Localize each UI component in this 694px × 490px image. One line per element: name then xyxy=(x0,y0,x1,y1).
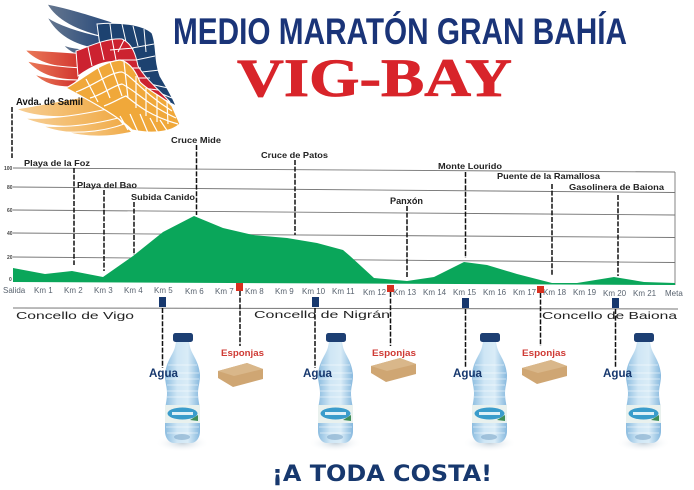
water station km 15 xyxy=(462,298,469,368)
route marker: Monte Lourido xyxy=(438,161,502,258)
label: Concello de Vigo: Concello de Vigo xyxy=(16,310,134,322)
label: Agua 3: Agua xyxy=(453,366,482,380)
km labels: Km 5 xyxy=(154,286,173,295)
pale lower feathers xyxy=(16,96,132,136)
icon: sponge 3 xyxy=(522,360,567,384)
chart axis labels: 40 xyxy=(7,231,13,237)
route marker: Subida Canido xyxy=(131,192,195,255)
route marker: Playa del Bao xyxy=(77,180,137,271)
water station km 20 xyxy=(612,298,619,368)
km labels: Km 16 xyxy=(483,288,507,297)
route marker: Cruce de Patos: Cruce de Patos xyxy=(261,150,328,160)
subtitle: VIG-BAY: VIG-BAY xyxy=(237,48,512,108)
label: Concello de Baiona: Concello de Baiona xyxy=(542,310,677,322)
route marker: Playa de la Foz xyxy=(24,158,90,265)
route marker: Cruce de Patos xyxy=(261,150,328,235)
sponge station km 7.5 xyxy=(236,283,243,346)
km labels: Km 3 xyxy=(94,286,113,295)
km labels xyxy=(3,286,683,298)
route marker: Avda. de Samil: Avda. de Samil xyxy=(16,96,83,108)
icon: water bottle 4 xyxy=(616,333,670,452)
label: Esponjas 1: Esponjas xyxy=(221,348,264,359)
chart: elevation profile xyxy=(3,166,683,298)
water station km 10 xyxy=(312,297,319,368)
chart grid xyxy=(13,168,675,285)
route marker: Puente de la Ramallosa: Puente de la Ramallosa xyxy=(497,171,600,181)
route marker: Panxón: Panxón xyxy=(390,196,423,206)
km labels: Km 19 xyxy=(573,288,597,297)
municipalities divider xyxy=(13,308,678,309)
slogan: ¡A TODA COSTA! xyxy=(272,462,492,487)
km labels: Km 1 xyxy=(34,286,53,295)
label: Esponjas 3: Esponjas xyxy=(522,348,566,359)
navy feathers xyxy=(47,4,176,106)
km labels: Km 6 xyxy=(185,287,204,296)
chart axis labels xyxy=(4,166,13,283)
water station km 5 xyxy=(159,297,166,368)
route marker: Puente de la Ramallosa xyxy=(497,171,600,276)
km labels: Km 11 xyxy=(332,287,355,296)
label: Agua 2: Agua xyxy=(303,366,332,380)
icon: water bottle 1 xyxy=(156,333,210,452)
chart axis labels: 60 xyxy=(7,208,13,214)
red feathers xyxy=(25,39,170,102)
km labels: Km 2 xyxy=(64,286,83,295)
km labels: Km 10 xyxy=(302,287,326,296)
icon: water bottle 2 xyxy=(308,333,362,452)
route marker: Monte Lourido: Monte Lourido xyxy=(438,161,502,171)
sponge station km 17.5 xyxy=(537,286,544,346)
sponge station km 12.5 xyxy=(387,285,394,346)
km labels: Salida xyxy=(3,286,26,295)
route marker: Subida Canido: Subida Canido xyxy=(131,192,195,202)
km labels: Km 4 xyxy=(124,286,143,295)
label: Esponjas 2: Esponjas xyxy=(372,348,416,359)
km labels: Km 21 xyxy=(633,289,657,298)
route marker: Gasolinera de Baiona xyxy=(569,182,664,276)
route marker: Playa de la Foz: Playa de la Foz xyxy=(24,158,90,168)
route marker: Avda. de Samil xyxy=(12,96,83,158)
icon: water bottle 3 xyxy=(462,333,516,452)
km labels: Km 7 xyxy=(215,287,234,296)
chart axis labels: 0 xyxy=(9,277,12,283)
chart axis labels: 20 xyxy=(7,255,13,261)
route marker: Gasolinera de Baiona: Gasolinera de Baiona xyxy=(569,182,664,192)
icon: sponge 2 xyxy=(371,358,416,382)
km labels: Km 8 xyxy=(245,287,264,296)
km labels: Km 15 xyxy=(453,288,477,297)
chart axis labels: 80 xyxy=(7,185,13,191)
label: Concello de Nigrán: Concello de Nigrán xyxy=(254,309,390,321)
km labels: Km 12 xyxy=(363,288,387,297)
km labels: Meta xyxy=(665,289,683,298)
route marker: Playa del Bao: Playa del Bao xyxy=(77,180,137,190)
route marker: Cruce Mide xyxy=(171,135,221,215)
label: Agua 4: Agua xyxy=(603,366,632,380)
km labels: Km 20 xyxy=(603,289,627,298)
km labels: Km 13 xyxy=(393,288,417,297)
route marker: Cruce Mide: Cruce Mide xyxy=(171,135,221,145)
icon: sponge 1 xyxy=(218,363,263,387)
route marker: Panxón xyxy=(390,196,423,277)
icon: winged logo xyxy=(16,4,180,136)
orange wing body xyxy=(66,60,180,133)
label: Agua 1: Agua xyxy=(149,366,178,380)
chart axis labels: 100 xyxy=(4,166,13,172)
green elevation area xyxy=(13,216,675,285)
km labels: Km 14 xyxy=(423,288,447,297)
km labels: Km 17 xyxy=(513,288,537,297)
km labels: Km 18 xyxy=(543,288,567,297)
km labels: Km 9 xyxy=(275,287,294,296)
